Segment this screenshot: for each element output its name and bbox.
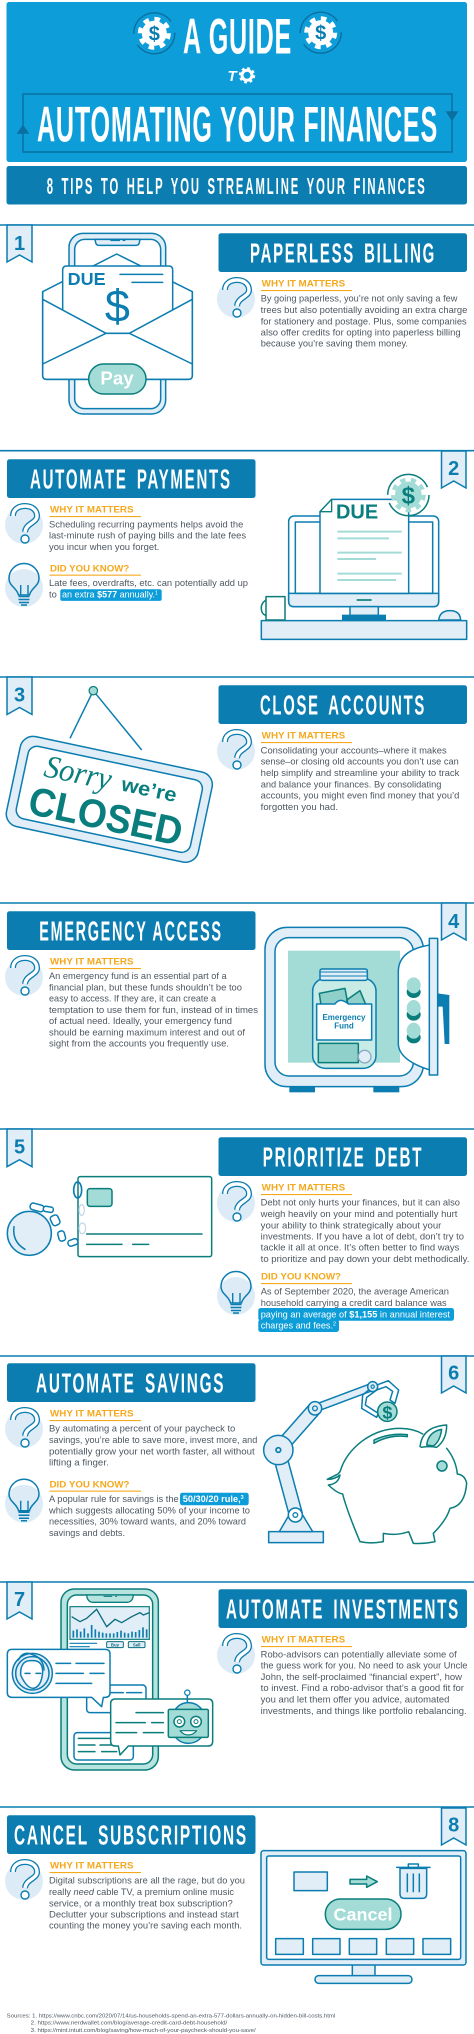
did you know text: household carrying a credit card balance was [261, 1298, 447, 1308]
why it matters text: Robo-advisors can potentially alleviate some of [261, 1649, 457, 1659]
why it matters text: should be earning maximum interest and out of [49, 1027, 245, 1037]
why it matters text: last-minute rush of paying bills and the late fees [49, 531, 246, 541]
illustration: computer with due bill: DUE [336, 501, 378, 523]
panel: tip 7 automate investments [7, 1582, 467, 1770]
did you know text: DID YOU KNOW? [50, 563, 129, 574]
heading: prioritize debt [218, 1137, 467, 1176]
did you know text: 1 [155, 590, 158, 596]
did you know text: Late fees, overdrafts, etc. can potentially add up [49, 578, 248, 588]
illustration: phone and envelope: DUE [68, 269, 106, 289]
why it matters text [49, 957, 258, 1049]
icon: dollar gear right [300, 12, 341, 53]
why it matters text: trees but also potentially avoiding an extra charge [261, 305, 467, 315]
illustration: phone and envelope [43, 233, 192, 414]
why it matters text: because you’re saving them money. [261, 339, 408, 349]
ribbon number 4 [442, 903, 466, 940]
why it matters text: investments, and things like portfolio rebalancing. [261, 1706, 467, 1716]
panel: tip 2 automate payments [5, 451, 467, 639]
why it matters text: tackle it all at once. It’s often better to find ways [261, 1243, 460, 1253]
why it matters text: also offer credits for opting into paperless billing [261, 328, 461, 338]
icon: question mark [5, 1410, 43, 1448]
heading: automate payments: AUTOMATE PAYMENTS [30, 464, 232, 495]
why it matters text: WHY IT MATTERS [50, 1409, 134, 1420]
panel: tip 5 prioritize debt [7, 1129, 469, 1332]
ribbon number 5: 5 [14, 1136, 25, 1158]
illustration: closed sign: CLOSED [25, 779, 186, 855]
why it matters text [260, 1183, 469, 1264]
header panel [6, 2, 467, 162]
why it matters text: WHY IT MATTERS [262, 279, 346, 290]
illustration: closed sign: Sorry [41, 748, 116, 797]
icon: question mark [217, 732, 255, 770]
loop frame with arrows [18, 94, 457, 152]
illustration: computer with due bill [261, 474, 467, 639]
ribbon number 1 [7, 225, 32, 262]
sources: Sources: 1. https://www.cnbc.com/2020/07/14/us-households-spend-an-extra-577-dollars-annually-on-hidden-bill-costs.html [7, 2013, 335, 2019]
did you know text [48, 1479, 250, 1538]
did you know text: 3 [241, 1495, 244, 1501]
illustration: phone with advisor chat: Buy [111, 1642, 120, 1647]
ribbon number 3: 3 [14, 685, 25, 707]
why it matters text [49, 1409, 257, 1468]
panel: tip 1 paperless billing [7, 225, 467, 414]
why it matters text: sight from the accounts you frequently use. [49, 1039, 229, 1049]
why it matters text: counting the money you’re saving each month. [49, 1921, 242, 1931]
why it matters text: Declutter your subscriptions and instead start [49, 1909, 239, 1919]
why it matters text: service, or a monthly treat box subscription? [49, 1898, 233, 1908]
why it matters text: WHY IT MATTERS [50, 505, 134, 516]
why it matters text: financial plan, but these funds shouldn’t be too [49, 982, 242, 992]
why it matters text [49, 1861, 245, 1931]
did you know text: paying an average of $1,155 in annual interest [261, 1309, 450, 1319]
why it matters text: lifting a finger. [49, 1458, 109, 1468]
icon: light bulb [5, 1479, 43, 1523]
why it matters text: forgotten you had. [261, 802, 338, 812]
why it matters text: By automating a percent of your paycheck to [49, 1424, 235, 1434]
why it matters text [261, 1635, 467, 1716]
why it matters text [261, 279, 467, 349]
why it matters text [49, 505, 246, 552]
sources [7, 2013, 335, 2034]
why it matters text: investments. If you have a lot of debt, don’t try to [261, 1231, 464, 1241]
sources: 2. https://www.nerdwallet.com/blog/average-credit-card-debt-household/ [31, 2021, 228, 2027]
icon: light bulb [217, 1272, 255, 1315]
ribbon number 8 [442, 1808, 466, 1845]
illustration: credit card with ball and chain [7, 1177, 212, 1257]
icon: light bulb [5, 564, 43, 607]
heading: cancel subscriptions [7, 1815, 256, 1854]
why it matters text: for stationery and postage. Plus, some companies [261, 316, 467, 326]
illustration: phone and envelope: Pay [100, 368, 134, 389]
ribbon number 6 [442, 1356, 466, 1393]
ribbon number 2: 2 [448, 458, 459, 480]
heading: automate payments [7, 459, 256, 498]
ribbon number 5 [7, 1129, 32, 1167]
did you know text: savings and debts. [49, 1528, 125, 1538]
why it matters text: savings, you’re able to save more, invest more, and [49, 1435, 257, 1445]
illustration: phone with advisor chat [7, 1589, 213, 1770]
why it matters text: your ability to think strategically about your [261, 1220, 441, 1230]
sources: 3. https://mint.intuit.com/blog/saving/how-much-of-your-paycheck-should-you-save/ [31, 2028, 256, 2034]
illustration: phone with advisor chat: Sell [133, 1642, 141, 1647]
why it matters text: to prioritize and pay down your debt methodically. [261, 1254, 469, 1264]
did you know text: A popular rule for savings is the [49, 1494, 179, 1504]
why it matters text: really need cable TV, a premium online music [49, 1887, 234, 1897]
illustration: robot arm and piggy bank: $ [382, 1402, 392, 1422]
why it matters text: Scheduling recurring payments helps avoid the [49, 519, 243, 529]
icon: question mark [5, 958, 43, 996]
why it matters text: the guess work for you. No need to ask your Uncle [261, 1661, 467, 1671]
why it matters text: Consolidating your accounts–where it makes [261, 745, 447, 755]
why it matters text: help simplify and streamline your ability to track [261, 768, 460, 778]
did you know text: DID YOU KNOW? [261, 1272, 341, 1283]
why it matters text: you and let them offer you advice, automated [261, 1694, 449, 1704]
why it matters text: WHY IT MATTERS [262, 731, 346, 742]
ribbon number 2 [442, 451, 466, 488]
ribbon number 7 [7, 1582, 32, 1619]
title: to: T [228, 68, 238, 85]
did you know text: As of September 2020, the average American [261, 1287, 449, 1297]
why it matters text: sense–or closing old accounts you don’t use can [261, 757, 459, 767]
why it matters text: of actual need. Ideally, your emergency fund [49, 1016, 232, 1026]
title: to [228, 68, 254, 85]
heading: close accounts [218, 685, 467, 724]
did you know text: charges and fees. [261, 1321, 335, 1331]
did you know text: which suggests allocating 50% of your income to [48, 1505, 250, 1515]
heading: paperless billing [218, 233, 467, 272]
illustration: TV with cancel button [261, 1851, 466, 1983]
why it matters text: WHY IT MATTERS [262, 1183, 346, 1194]
did you know text: necessities, 30% toward wants, and 20% toward [49, 1517, 246, 1527]
panel: tip 6 automate savings [5, 1356, 467, 1543]
heading: automate savings [7, 1363, 256, 1402]
why it matters text: WHY IT MATTERS [50, 957, 134, 968]
panel: tip 3 close accounts [4, 677, 467, 865]
title line 1: A GUIDE [183, 8, 292, 64]
did you know text: an extra $577 annually. [62, 589, 156, 599]
heading: automate savings: AUTOMATE SAVINGS [36, 1368, 225, 1399]
heading: emergency access [7, 911, 256, 950]
illustration: phone and envelope: $ [105, 280, 130, 331]
illustration: robot arm and piggy bank [264, 1381, 467, 1543]
icon: dollar gear left [134, 13, 175, 54]
ribbon number 6: 6 [448, 1362, 459, 1384]
why it matters text: weigh heavily on your mind and potentially hurt [260, 1209, 458, 1219]
why it matters text: Debt not only hurts your finances, but it can also [261, 1198, 460, 1208]
why it matters text: you incur when you forget. [49, 542, 159, 552]
illustration: closed sign [4, 686, 215, 865]
panel: tip 4 emergency access [5, 903, 466, 1092]
icon: question mark [217, 280, 255, 318]
why it matters text: to invest. Find a robo-advisor that’s a good fit for [261, 1683, 464, 1693]
illustration: safe with emergency fund jar: Emergency [322, 1013, 366, 1022]
ribbon number 7: 7 [14, 1589, 25, 1611]
icon: question mark [5, 1862, 43, 1900]
icon: question mark [217, 1636, 255, 1674]
ribbon number 4: 4 [448, 911, 460, 933]
illustration: closed sign: we’re [118, 774, 179, 807]
why it matters text: accounts, you might even find money that you’d [261, 791, 459, 801]
why it matters text: John, the self-proclaimed “financial expert”, how [261, 1672, 462, 1682]
illustration: safe with emergency fund jar [265, 927, 449, 1092]
illustration: safe with emergency fund jar: Fund [334, 1022, 354, 1031]
did you know text [258, 1272, 454, 1332]
panel: tip 8 cancel subscriptions [5, 1808, 466, 1983]
heading: emergency access: EMERGENCY ACCESS [39, 916, 223, 947]
did you know text: 2 [333, 1322, 336, 1328]
why it matters text: By going paperless, you’re not only saving a few [261, 294, 458, 304]
did you know text: 50/30/20 rule, [183, 1494, 241, 1504]
illustration: TV with cancel button: Cancel [334, 1905, 392, 1925]
did you know text [49, 563, 248, 601]
ribbon number 8: 8 [448, 1815, 459, 1837]
why it matters text: easy to access. If they are, it can create a [49, 994, 217, 1004]
did you know text: to [49, 589, 57, 599]
ribbon number 1: 1 [14, 233, 25, 255]
icon: question mark [5, 506, 43, 544]
why it matters text: Digital subscriptions are all the rage, but do you [49, 1876, 245, 1886]
subtitle band [6, 166, 467, 204]
why it matters text: and balance your finances. By consolidating [261, 779, 441, 789]
why it matters text: An emergency fund is an essential part of a [49, 971, 228, 981]
heading: cancel subscriptions: CANCEL SUBSCRIPTIONS [14, 1820, 248, 1851]
why it matters text: WHY IT MATTERS [262, 1635, 346, 1646]
icon: question mark [217, 1184, 255, 1222]
icon: dollar gear left: $ [149, 23, 160, 45]
why it matters text: temptation to use them for fun, instead of in times [49, 1005, 258, 1015]
why it matters text [261, 731, 460, 812]
why it matters text: WHY IT MATTERS [50, 1861, 134, 1872]
ribbon number 3 [7, 677, 32, 714]
illustration: computer with due bill: $ [402, 483, 415, 510]
why it matters text: potentially grow your net worth faster, all without [49, 1446, 255, 1456]
did you know text: DID YOU KNOW? [50, 1479, 130, 1490]
icon: dollar gear right: $ [315, 23, 326, 45]
